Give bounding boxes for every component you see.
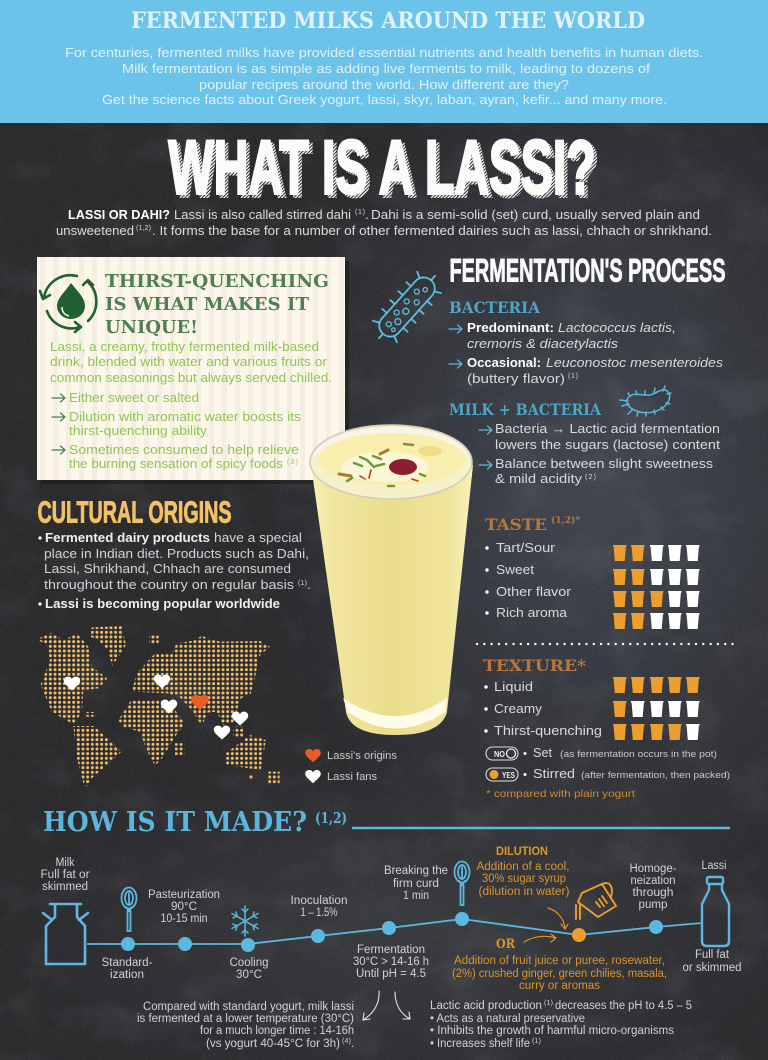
toggle: set, no: NO <box>494 750 505 759</box>
label: fermentation: 30°C > 14-16 h <box>353 956 429 968</box>
label: breaking the firm curd: 1 min <box>403 890 429 902</box>
note: lactic acid production: • Acts as a natural preservative <box>430 1013 585 1025</box>
card heading: UNIQUE! <box>105 317 198 338</box>
map legend: Lassi fans <box>327 771 378 783</box>
label: standardization: Standard- <box>102 957 153 969</box>
toggle: set, no: Set <box>533 746 553 760</box>
section: bacteria: cremoris & diacetylactis <box>467 336 619 351</box>
map legend <box>305 749 397 783</box>
header intro text: Milk fermentation is as simple as adding live ferments to milk, leading to dozens of <box>122 61 650 76</box>
callout: dilution: Addition of a cool, <box>476 861 570 873</box>
note: lactic acid production: decreases the pH to 4.5 – 5 <box>555 1000 692 1012</box>
intro: lassi or dahi: unsweetened <box>56 223 134 238</box>
toggle: stirred, yes: YES <box>502 771 516 780</box>
note: comparison with standard yogurt <box>137 1001 354 1050</box>
card heading <box>105 271 329 338</box>
label: cooling: Cooling <box>230 957 268 969</box>
text: cultural origins <box>38 530 311 611</box>
callout: flavour additions: Addition of fruit juice or puree, rosewater, <box>454 955 665 967</box>
photo: glass of lassi <box>310 425 473 735</box>
section: milk + bacteria: lowers the sugars (lactose) content <box>495 437 720 452</box>
section: texture ratings: Thirst-quenching <box>494 723 602 738</box>
toggle: stirred, yes <box>486 767 730 781</box>
intro: lassi or dahi: (1) <box>355 209 365 216</box>
header intro text: Get the science facts about Greek yogurt, lassi, skyr, laban, ayran, kefir... and many more. <box>102 92 667 107</box>
section: bacteria: (buttery flavor) <box>467 371 565 386</box>
panel: thirst-quenching card <box>37 257 349 484</box>
card body text: Sometimes consumed to help relieve <box>69 442 299 457</box>
card heading: THIRST-QUENCHING <box>105 271 329 292</box>
section: milk + bacteria: MILK + BACTERIA <box>449 400 602 419</box>
icon: whisk two <box>454 862 470 905</box>
icon: whisk one <box>122 888 136 931</box>
toggle: stirred, yes: Stirred <box>533 767 575 781</box>
section: milk + bacteria: (2) <box>585 474 596 481</box>
text: cultural origins: (1) <box>298 580 307 587</box>
callout: flavour additions: (2%) crushed ginger, green chilies, masala, <box>452 968 667 980</box>
label: homogeneization: through <box>632 887 674 899</box>
icon: water drop with arrows <box>40 275 96 332</box>
intro: lassi or dahi: (1,2) <box>136 225 151 232</box>
card body text: thirst-quenching ability <box>69 423 208 438</box>
section: bacteria <box>449 298 724 386</box>
header intro text: popular recipes around the world. How different are they? <box>199 77 569 92</box>
note: lactic acid production <box>430 1000 692 1050</box>
callout: dilution: 30% sugar syrup <box>482 873 566 885</box>
label: lassi: or skimmed <box>682 962 742 974</box>
label: fermentation: Until pH = 4.5 <box>356 968 426 980</box>
label: milk <box>40 857 90 893</box>
header intro text <box>65 45 703 107</box>
label: homogeneization: Homoge- <box>630 863 677 875</box>
card body text: common seasonings but always served chilled. <box>50 370 332 385</box>
icon: milk bottle <box>702 877 729 946</box>
section: taste ratings <box>485 515 700 629</box>
callout: dilution: (dilution in water) <box>478 886 570 898</box>
section: bacteria: Predominant: <box>467 320 554 335</box>
world map <box>37 626 280 789</box>
text: cultural origins: Lassi, Shrikhand, Chhach are consumed <box>44 561 291 576</box>
label: inoculation: Inoculation <box>290 895 348 907</box>
text: cultural origins: throughout the country on regular basis <box>44 577 295 592</box>
card body text: Dilution with aromatic water boosts its <box>69 409 302 424</box>
label: homogeneization: pump <box>638 899 668 911</box>
callout: flavour additions: curry or aromas <box>519 980 600 992</box>
process timeline <box>87 912 702 952</box>
label: inoculation: 1 – 1.5% <box>300 907 338 919</box>
section: taste ratings: TASTE <box>485 515 547 534</box>
heading: how is it made: HOW IS IT MADE? <box>43 807 307 838</box>
label: homogeneization: neization <box>630 875 676 887</box>
intro: lassi or dahi: Lassi is also called stirred dahi <box>174 207 351 222</box>
icon: snowflake <box>232 906 258 936</box>
text: cultural origins: . <box>307 577 311 592</box>
label: lassi: Full fat <box>695 949 730 961</box>
heading: how is it made: (1,2) <box>315 809 347 827</box>
section: texture ratings: TEXTURE* <box>483 656 587 675</box>
section: texture ratings: Creamy <box>494 701 543 716</box>
intro: lassi or dahi: LASSI OR DAHI? <box>68 207 170 222</box>
callout: flavour additions <box>452 955 667 992</box>
label: standardization <box>102 957 153 981</box>
callout: dilution <box>476 846 570 898</box>
label: lassi: Lassi <box>702 860 726 872</box>
label: cooling: 30°C <box>236 969 262 981</box>
label: milk: skimmed <box>42 881 88 893</box>
intro: lassi or dahi: . <box>365 207 369 222</box>
section: bacteria: Lactococcus lactis, <box>558 320 676 335</box>
note: comparison with standard yogurt: (vs yogurt 40-45°C for 3h) <box>206 1038 340 1050</box>
callout: dilution: DILUTION <box>496 846 548 858</box>
section: bacteria: BACTERIA <box>449 298 541 317</box>
intro: lassi or dahi: . It forms the base for a number of other fermented dairies such as lassi, chhach or shrikhand. <box>152 223 712 238</box>
arrow: to lactic acid note <box>395 992 410 1019</box>
text: cultural origins: Fermented dairy products <box>45 530 210 545</box>
card body text <box>50 339 332 471</box>
label: milk: Full fat or <box>40 869 90 881</box>
label: breaking the firm curd <box>384 865 448 902</box>
heading: how is it made <box>43 807 730 838</box>
section: taste ratings: Other flavor <box>496 584 572 599</box>
text: cultural origins: have a special <box>214 530 302 545</box>
section: taste ratings: Tart/Sour <box>496 540 556 555</box>
section: bacteria: (1) <box>568 373 578 380</box>
footnote: compared with plain yogurt: * compared with plain yogurt <box>486 788 635 800</box>
card body text: Lassi, a creamy, frothy fermented milk-based <box>50 339 319 354</box>
garnish <box>339 444 442 486</box>
icon: measuring jug <box>576 883 616 919</box>
section: milk + bacteria: Bacteria → Lactic acid fermentation <box>495 421 720 436</box>
header intro text: For centuries, fermented milks have provided essential nutrients and health benefits in human diets. <box>65 45 703 60</box>
note: lactic acid production: (1) <box>532 1038 541 1045</box>
label: breaking the firm curd: Breaking the <box>384 865 448 877</box>
taste cups <box>613 545 700 629</box>
section: milk + bacteria: Balance between slight sweetness <box>495 456 714 471</box>
section: taste ratings: Rich aroma <box>496 605 568 620</box>
hearts <box>64 675 248 740</box>
label: pasteurization: 90°C <box>171 901 197 913</box>
card body text: Either sweet or salted <box>69 390 199 405</box>
note: lactic acid production: • Inhibits the growth of harmful micro-organisms <box>430 1025 674 1037</box>
label: fermentation <box>353 944 429 980</box>
header band <box>0 0 768 123</box>
label: pasteurization: Pasteurization <box>148 889 220 901</box>
label: standardization: ization <box>110 969 144 981</box>
label: lassi <box>682 860 742 974</box>
icon: bean bacterium <box>620 386 671 416</box>
note: lactic acid production: • Increases shelf life <box>430 1038 530 1050</box>
label: fermentation: Fermentation <box>357 944 425 956</box>
note: comparison with standard yogurt: . <box>351 1038 354 1050</box>
section: texture ratings: Liquid <box>494 679 533 694</box>
note: lactic acid production: (1) <box>544 1000 553 1007</box>
header title: FERMENTED MILKS AROUND THE WORLD <box>131 8 645 34</box>
label: breaking the firm curd: firm curd <box>393 878 439 890</box>
note: comparison with standard yogurt: Compared with standard yogurt, milk lassi <box>143 1001 354 1013</box>
text: cultural origins: Lassi is becoming popular worldwide <box>45 596 280 611</box>
section: bacteria: Leuconostoc mesenteroides <box>546 355 724 370</box>
label: inoculation <box>290 895 348 919</box>
label: homogeneization <box>630 863 677 911</box>
section: milk + bacteria: & mild acidity <box>495 471 583 486</box>
section: bacteria: Occasional: <box>467 355 541 370</box>
card body text: (3) <box>287 459 298 466</box>
text: cultural origins: place in Indian diet. Products such as Dahi, <box>44 546 309 561</box>
or label and arrow: OR <box>496 937 515 952</box>
note: lactic acid production: Lactic acid production <box>430 1000 542 1012</box>
label: cooling <box>230 957 268 981</box>
map legend: Lassi's origins <box>327 750 397 762</box>
label: pasteurization: 10-15 min <box>160 913 208 925</box>
note: comparison with standard yogurt: for a much longer time : 14-16h <box>200 1025 354 1037</box>
section: taste ratings: Sweet <box>496 562 534 577</box>
process labels <box>40 857 742 981</box>
toggle: stirred, yes: (after fermentation, then packed) <box>581 770 730 781</box>
section: texture ratings <box>483 656 700 740</box>
texture cups <box>613 677 700 740</box>
arrow: to yogurt comparison <box>363 991 379 1020</box>
arrow: dilution to node <box>548 908 568 929</box>
icon: milk can <box>43 904 88 964</box>
intro: lassi or dahi <box>56 207 712 238</box>
icon: rod bacterium <box>366 264 448 350</box>
note: comparison with standard yogurt: is fermented at a lower temperature (30°C) <box>137 1013 354 1025</box>
card heading: IS WHAT MAKES IT <box>105 294 310 315</box>
toggle: set, no: (as fermentation occurs in the pot) <box>560 749 717 760</box>
card body text: drink, blended with water and various fruits or <box>50 354 328 369</box>
section: milk + bacteria <box>449 400 720 486</box>
heading: cultural origins: CULTURAL ORIGINS <box>38 496 232 530</box>
label: pasteurization <box>148 889 220 925</box>
card body text: the burning sensation of spicy foods <box>69 456 284 471</box>
or label and arrow <box>496 934 556 952</box>
intro: lassi or dahi: Dahi is a semi-solid (set) curd, usually served plain and <box>371 207 700 222</box>
toggle: set, no <box>486 746 717 760</box>
label: milk: Milk <box>56 857 75 869</box>
section: taste ratings: (1,2)* <box>551 515 580 526</box>
note: comparison with standard yogurt: (4) <box>342 1038 351 1045</box>
